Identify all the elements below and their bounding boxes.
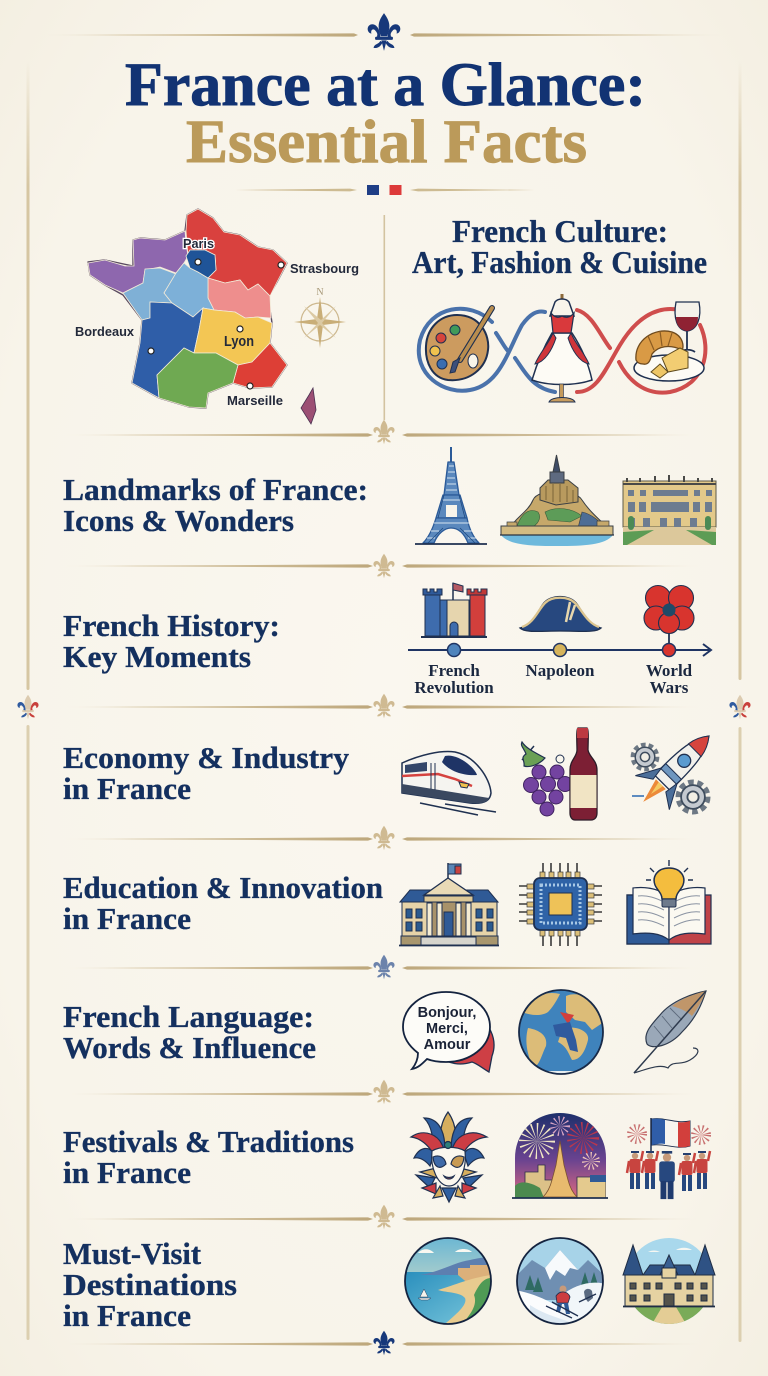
icon: Mont-Saint-Michel — [500, 455, 614, 546]
divider 2 — [60, 554, 705, 578]
icon: speech bubble — [403, 992, 494, 1072]
region: pale pink east — [208, 278, 271, 318]
divider 7 — [60, 1205, 705, 1229]
icon: dress on mannequin — [532, 294, 592, 402]
icon: open book with lightbulb — [627, 860, 711, 944]
region: centre light blue — [164, 263, 214, 317]
icon: compass rose: N — [316, 287, 324, 298]
heading: Festivals and Traditions: Festivals & Traditions — [63, 1124, 354, 1159]
bubble text: Merci, — [426, 1021, 468, 1037]
heading: French Culture — [412, 214, 707, 280]
timeline label: Napoleon: Napoleon — [526, 661, 595, 680]
heading: Education and Innovation: in France — [63, 901, 191, 936]
heading: Landmarks of France — [63, 472, 368, 538]
icon: Alps skier — [515, 1238, 606, 1324]
region: northeast — [186, 209, 287, 296]
vertical divider — [384, 215, 385, 420]
right page border — [738, 60, 742, 1342]
title — [125, 52, 646, 176]
timeline label: World Wars: World — [646, 661, 693, 680]
icon: paint palette — [426, 308, 492, 380]
timeline — [408, 644, 711, 656]
divider 8 — [60, 1331, 705, 1355]
city markers — [148, 259, 284, 389]
ribbon: blue — [419, 309, 555, 392]
icon: Eiffel Tower — [415, 447, 487, 544]
icon: Palace of Versailles — [623, 475, 716, 545]
timeline label: World Wars: Wars — [650, 678, 689, 697]
heading: Landmarks of France: Icons & Wonders — [63, 503, 294, 538]
icon: globe — [519, 990, 604, 1078]
icon: Eiffel Tower fireworks — [512, 1113, 608, 1198]
heading: Must-Visit Destinations: Destinations — [63, 1267, 237, 1302]
icon: rocket and gears — [626, 719, 726, 819]
icon: grapes and wine bottle — [521, 728, 597, 820]
heading: French History: Key Moments — [63, 639, 251, 674]
region: south green — [157, 348, 238, 408]
heading: French Language — [63, 999, 316, 1065]
heading: Economy and Industry: Economy & Industry — [63, 740, 349, 775]
icon: left tricolour fleur-de-lis — [17, 695, 39, 719]
heading: Must-Visit Destinations — [63, 1236, 237, 1333]
region: west light blue — [123, 268, 176, 320]
divider 1 — [60, 420, 705, 444]
region: yellow Lyon — [194, 308, 272, 365]
left page border — [26, 60, 30, 1340]
heading: Education and Innovation: Education & Innovation — [63, 870, 383, 905]
region: Corsica — [301, 388, 316, 424]
top ornament — [40, 13, 728, 51]
panel: map of France — [75, 209, 359, 424]
icon: feather quill — [634, 991, 706, 1073]
icon: poppy — [644, 586, 694, 648]
timeline label: French Revolution: French — [428, 661, 480, 680]
divider 6 — [60, 1080, 705, 1104]
region: Brittany and Normandy — [88, 231, 188, 293]
region: southwest blue — [132, 302, 203, 398]
heading: French History — [63, 608, 280, 674]
divider 3 — [60, 694, 705, 718]
timeline label: French Revolution: Revolution — [414, 678, 494, 697]
bubble text: Amour — [424, 1037, 471, 1053]
city label: Paris: Paris — [183, 237, 214, 251]
flag divider — [235, 185, 535, 195]
bubble text: Bonjour, — [418, 1005, 476, 1021]
city label: Strasbourg: Strasbourg — [290, 262, 359, 276]
heading: Economy and Industry: in France — [63, 771, 191, 806]
heading: Education and Innovation — [63, 870, 383, 936]
region: Paris — [186, 250, 216, 278]
heading: Landmarks of France: Landmarks of France: — [63, 472, 368, 507]
icon: TGV train — [402, 752, 496, 815]
icon: compass rose — [294, 287, 346, 348]
icon: Bastille in tricolour — [421, 583, 487, 637]
icon: Napoleon bicorne hat — [520, 596, 601, 631]
icon group: art, fashion, cuisine — [419, 294, 705, 402]
heading: Must-Visit Destinations: Must-Visit — [63, 1236, 202, 1271]
heading: French Culture: French Culture: — [452, 214, 668, 249]
icon: university building — [399, 863, 499, 946]
city label: Lyon: Lyon — [224, 334, 254, 350]
heading: Must-Visit Destinations: in France — [63, 1298, 191, 1333]
region: southeast red — [233, 343, 287, 388]
heading: Festivals and Traditions: in France — [63, 1155, 191, 1190]
heading: Festivals and Traditions — [63, 1124, 354, 1190]
heading: French Culture: Art, Fashion & Cuisine — [412, 245, 707, 280]
heading: French Language: Words & Influence — [63, 1030, 316, 1065]
icon: Riviera coast — [405, 1238, 491, 1324]
icon: wine, croissant and cheese — [634, 302, 704, 381]
divider 4 — [60, 826, 705, 850]
heading: French History: French History: — [63, 608, 280, 643]
heading: Economy and Industry — [63, 740, 349, 806]
icon: Loire chateau — [620, 1238, 720, 1325]
city label: Bordeaux: Bordeaux — [75, 325, 134, 339]
title: Essential Facts — [186, 109, 587, 176]
icon: carnival mask — [411, 1112, 487, 1202]
icon: microchip — [519, 863, 602, 946]
title: France at a Glance: — [125, 52, 646, 119]
divider 5 — [60, 955, 705, 979]
icon: right tricolour fleur-de-lis — [729, 695, 751, 719]
heading: French Language: French Language: — [63, 999, 314, 1034]
icon: Bastille Day parade — [627, 1118, 710, 1199]
ribbon: red — [577, 309, 705, 393]
map outline — [88, 209, 287, 408]
city label: Marseille: Marseille — [227, 394, 283, 408]
